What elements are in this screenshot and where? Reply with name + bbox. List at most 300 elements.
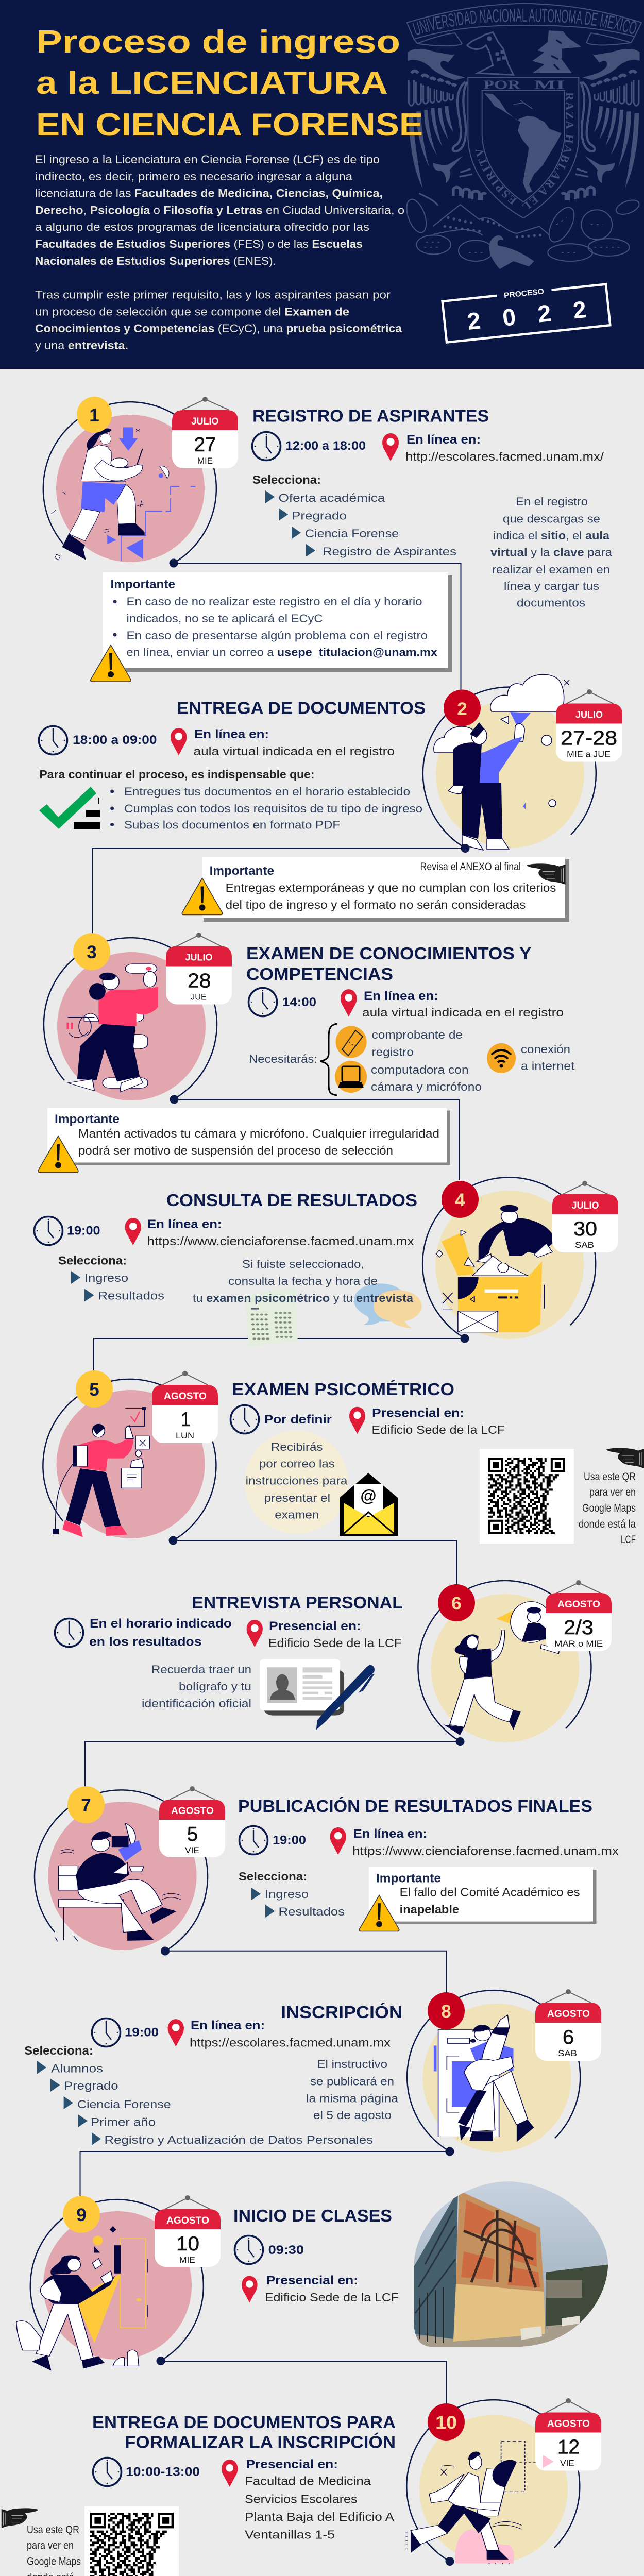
illustration: man with giant pencil (434, 2015, 534, 2142)
callout: importante: En caso de no realizar este registro en el día y horario (127, 595, 422, 608)
time: En el horario indicado (90, 1617, 232, 1631)
QR note (579, 1471, 636, 1546)
time: 10:00-13:00 (126, 2465, 200, 2479)
time: en los resultados (89, 1635, 201, 1649)
icon: pin (168, 2019, 184, 2046)
what you need: conexión (521, 1043, 570, 1056)
navigation steps: Resultados (278, 1905, 345, 1918)
location: En línea en: (364, 989, 438, 1003)
icon: ticket (336, 1026, 367, 1058)
ring (43, 402, 216, 563)
intro text: un proceso de selección que se compone del Examen de (35, 306, 349, 318)
calendar: agosto 5: 5 (187, 1823, 198, 1845)
time: 09:30 (268, 2243, 304, 2257)
navigation steps: Ingreso (265, 1888, 309, 1901)
title: INICIO DE CLASES (233, 2206, 392, 2225)
side note: realizar el examen en (492, 563, 610, 576)
location (372, 1406, 505, 1436)
note: instrucciones por correo: por correo las (259, 1457, 335, 1470)
callout: importante: indicados, no se te aplicará el ECyC (127, 612, 323, 625)
illustration: woman at toggle (68, 964, 158, 1092)
icon: clock (235, 2236, 263, 2264)
number badge 4 (442, 1181, 479, 1218)
dot endpoint (445, 2557, 454, 2566)
step 3: examen de conocimientos (38, 933, 574, 1180)
note: examen psicométrico and entrevista (193, 1258, 414, 1304)
step 4: consulta de resultados (34, 1177, 618, 1370)
circle background (431, 1594, 579, 1742)
intro text: Derecho, Psicología o Filosofía y Letras en Ciudad Universitaria, o (35, 204, 404, 217)
title: ENTREGA DE DOCUMENTOS PARA (92, 2413, 396, 2432)
circle background (48, 1802, 197, 1950)
intro text: Conocimientos y Competencias (ECyC), una prueba psicométrica (35, 322, 402, 335)
QR note: Usa este QR (27, 2524, 79, 2536)
what you need (249, 1024, 574, 1095)
QR note: para ver en (589, 1486, 636, 1498)
calendar: julio 30: SAB (575, 1240, 594, 1250)
circle background (57, 1390, 205, 1538)
side note: En el registro (516, 495, 588, 508)
title: COMPETENCIAS (246, 964, 393, 984)
requirements list: Entregues tus documentos en el horario establecido (124, 785, 410, 798)
title: CONSULTA DE RESULTADOS (166, 1191, 417, 1210)
navigation steps: Pregrado (64, 2079, 118, 2092)
location: Presencial en: (269, 1619, 361, 1633)
calendar: agosto 12: 12 (557, 2436, 580, 2459)
note: instrucciones por correo: examen (275, 1509, 319, 1521)
connector 1 to 2 (174, 563, 461, 690)
connector end dots (157, 558, 470, 2365)
location (245, 2458, 395, 2541)
calendar: agosto 5: AGOSTO (171, 1806, 214, 1817)
QR note: para ver en (27, 2540, 74, 2551)
title: ENTREGA DE DOCUMENTOS (177, 699, 426, 717)
calendar: agosto 1: AGOSTO (164, 1391, 207, 1402)
time: 14:00 (282, 995, 316, 1009)
navigation steps: Ciencia Forense (77, 2098, 171, 2111)
navigation steps: Selecciona: (252, 473, 321, 486)
number badge 10 (428, 2403, 465, 2441)
note: instructivo: El instructivo (317, 2058, 387, 2071)
icon: clock (93, 2458, 122, 2486)
location (147, 1217, 414, 1248)
note: examen psicométrico and entrevista: consulta la fecha y hora de (228, 1275, 378, 1287)
side note: línea y cargar tus (504, 580, 599, 592)
title (92, 2413, 396, 2451)
calendar: julio 27: MIE (197, 456, 213, 466)
step 9: inicio de clases (16, 2179, 611, 2404)
illustration: man on bench (56, 1823, 181, 1941)
step 1: registro de aspirantes (43, 397, 613, 690)
UNAM crest watermark: RAZA HABLARA EL ESPIRITV (475, 93, 573, 209)
navigation steps: Oferta académica (278, 492, 385, 504)
location: Edificio Sede de la LCF (265, 2291, 399, 2304)
requirements list: Subas los documentos en formato PDF (124, 819, 340, 832)
ring (44, 938, 217, 1099)
calendar: agosto 12 (535, 2398, 601, 2471)
time: 18:00 a 09:00 (73, 733, 157, 747)
calendar: julio 28: JUE (191, 992, 207, 1002)
requirements heading: Para continuar el proceso, es indispensable que: (39, 768, 314, 781)
icon: pin (222, 2460, 238, 2487)
location: Presencial en: (372, 1406, 464, 1420)
callout: importante: en línea, enviar un correo a usepe_titulacion@unam.mx (127, 646, 438, 659)
navigation steps: Registro de Aspirantes (323, 545, 456, 558)
navigation steps: Resultados (98, 1289, 164, 1302)
note: instrucciones por correo: presentar el (264, 1492, 330, 1504)
title: PUBLICACIÓN DE RESULTADOS FINALES (238, 1797, 592, 1816)
callout: importante: Entregas extemporáneas y que no cumplan con los criterios (226, 881, 556, 894)
calendar: julio 27-28: MIE a JUE (567, 749, 611, 759)
callout: importante: podrá ser motivo de suspensión del proceso de selección (78, 1144, 393, 1157)
navigation steps: Pregrado (292, 509, 347, 522)
location (268, 1619, 402, 1650)
number badge 4: 4 (455, 1190, 465, 1210)
title: FORMALIZAR LA INSCRIPCIÓN (125, 2433, 396, 2451)
step 5: examen psicométrico (43, 1370, 644, 1585)
connector 2 to 3 (92, 849, 465, 933)
ring (418, 1581, 591, 1741)
calendar: agosto 5: VIE (185, 1845, 199, 1855)
number badge 6: 6 (451, 1594, 462, 1614)
icon: email envelope (340, 1473, 398, 1536)
intro text (35, 153, 404, 352)
number badge 6 (438, 1584, 475, 1621)
ring (30, 2199, 204, 2361)
icon: check mark (39, 787, 100, 829)
requirements list: Cumplas con todos los requisitos de tu tipo de ingreso (124, 802, 422, 815)
note: examen psicométrico and entrevista: tu examen psicométrico y tu entrevista (193, 1292, 414, 1304)
what you need: cámara y micrófono (371, 1080, 482, 1093)
calendar: agosto 10: MIE (179, 2255, 195, 2265)
calendar: julio 30 (552, 1181, 618, 1252)
calendar: agosto 1: LUN (176, 1431, 194, 1440)
note: instructivo (306, 2058, 399, 2122)
location: Presencial en: (266, 2274, 358, 2287)
location: Servicios Escolares (245, 2493, 358, 2506)
location (265, 2274, 399, 2304)
connector 8 to 9 (80, 2151, 450, 2196)
intro text: licenciatura de las Facultades de Medicina, Ciencias, Química, (35, 187, 383, 200)
title: ENTREVISTA PERSONAL (192, 1593, 403, 1612)
calendar: agosto 6: SAB (558, 2048, 577, 2058)
step 7: publicación de resultados finales (35, 1786, 619, 1995)
UNAM crest watermark: POR (483, 78, 521, 92)
number badge 8: 8 (441, 2002, 451, 2022)
note: instrucciones por correo (245, 1431, 348, 1534)
callout: importante (91, 572, 452, 682)
icon: clock (92, 2019, 121, 2046)
navigation steps: Ingreso (84, 1272, 128, 1284)
location: aula virtual indicada en el registro (362, 1006, 564, 1019)
number badge 3: 3 (87, 942, 97, 962)
main title: Proceso de ingreso (36, 24, 400, 60)
note: traer bolígrafo: identificación oficial (142, 1697, 251, 1710)
location: aula virtual indicada en el registro (194, 744, 395, 758)
intro text: y una entrevista. (35, 339, 128, 352)
time: 19:00 (67, 1224, 100, 1238)
note: instructivo: se publicará en (310, 2075, 394, 2088)
number badge 8 (428, 1992, 465, 2029)
note: examen psicométrico and entrevista: Si fuiste seleccionado, (242, 1258, 364, 1270)
navigation steps: Ciencia Forense (305, 527, 399, 540)
callout: importante: Revisa el ANEXO al final (420, 861, 521, 873)
icon: clock (239, 1826, 268, 1855)
what you need: registro (372, 1046, 414, 1058)
ring (35, 1790, 208, 1951)
what you need: Necesitarás: (249, 1053, 317, 1065)
location: En línea en: (194, 727, 269, 741)
navigation steps (239, 1870, 345, 1918)
requirements list (110, 785, 422, 832)
note: traer bolígrafo: Recuerda traer un (151, 1663, 251, 1676)
ring (406, 2400, 580, 2562)
icon: clock (39, 726, 67, 754)
icon: clock (34, 1217, 63, 1245)
UNAM crest watermark: MI (534, 78, 565, 92)
calendar: julio 27: 27 (194, 434, 216, 456)
icon: wifi (487, 1043, 516, 1073)
icon: pin (247, 1620, 263, 1647)
UNAM crest watermark (406, 3, 642, 269)
number badge 5: 5 (89, 1380, 99, 1400)
time: 12:00 a 18:00 (285, 439, 366, 453)
location: Presencial en: (246, 2458, 338, 2471)
callout: importante: El fallo del Comité Académico es (400, 1886, 580, 1899)
icon: pin (341, 989, 357, 1016)
illustration: woman opening door (16, 2226, 148, 2371)
icon: pointing hand (606, 1448, 644, 1468)
title: EXAMEN DE CONOCIMIENTOS Y (246, 944, 532, 963)
location (190, 2019, 391, 2049)
calendar: julio 27: JULIO (192, 416, 218, 427)
circle background (422, 2004, 571, 2152)
intro text: Nacionales de Estudios Superiores (ENES). (35, 255, 276, 267)
location: Edificio Sede de la LCF (268, 1636, 402, 1650)
location (352, 1827, 619, 1858)
ring (407, 1990, 580, 2151)
icon: laptop (335, 1061, 367, 1093)
header panel (0, 0, 644, 369)
proceso 2022 stamp: 2 0 2 2 (466, 296, 588, 335)
callout: importante: Importante (55, 1112, 120, 1126)
time: 19:00 (273, 1834, 306, 1848)
number badge 2 (444, 689, 481, 726)
QR note (27, 2524, 81, 2576)
callout: importante: Importante (210, 864, 274, 878)
side note: que descargas se (503, 512, 600, 526)
callout: importante (359, 1867, 597, 1931)
location: En línea en: (353, 1827, 427, 1841)
calendar: julio 27-28: JULIO (575, 710, 603, 720)
calendar: agosto 6: 6 (563, 2026, 574, 2048)
side note (490, 495, 613, 609)
location: http://escolares.facmed.unam.mx/ (405, 450, 604, 463)
QR note: Google Maps (27, 2556, 81, 2568)
connector 9 to 10 (161, 2361, 446, 2404)
title: EXAMEN PSICOMÉTRICO (232, 1380, 454, 1399)
icon: pin (125, 1218, 141, 1245)
navigation steps (252, 473, 456, 558)
location: En línea en: (147, 1217, 222, 1231)
illustration: man with box (436, 1205, 554, 1332)
callout: importante (38, 1108, 450, 1173)
calendar: agosto 5 (159, 1786, 225, 1857)
number badge 3 (73, 933, 110, 970)
UNAM crest watermark: UNIVERSIDAD NACIONAL AUTONOMA DE MEXICO (412, 8, 637, 35)
calendar: agosto 2/3: AGOSTO (557, 1599, 600, 1610)
navigation steps (58, 1254, 164, 1302)
icon: pin (242, 2276, 258, 2302)
decoration: answer sheet and speech bubbles (245, 1283, 422, 1346)
connector 3 to 4 (174, 1100, 459, 1180)
navigation steps (24, 2044, 373, 2146)
location (194, 727, 395, 758)
callout: importante: En caso de presentarse algún problema con el registro (127, 629, 428, 642)
intro text: Facultades de Estudios Superiores (FES) o de las Escuelas (35, 238, 363, 250)
number badge 7: 7 (81, 1795, 91, 1816)
QR code (480, 1449, 574, 1544)
callout: importante: del tipo de ingreso y el formato no serán consideradas (226, 898, 526, 911)
note: instructivo: la misma página (306, 2092, 399, 2105)
connector 5 to 6 (173, 1540, 457, 1585)
icon: pin (382, 433, 399, 461)
callout: importante: inapelable (400, 1903, 459, 1916)
main title: a la LICENCIATURA (36, 65, 388, 101)
calendar: agosto 12: AGOSTO (547, 2418, 590, 2430)
number badge 1: 1 (89, 405, 99, 426)
step 6: entrevista personal (55, 1580, 612, 1786)
QR note: LCF (621, 1534, 636, 1546)
step 2: entrega de documentos (39, 674, 622, 933)
proceso 2022 stamp (442, 281, 610, 343)
ring (43, 1379, 216, 1540)
location: En línea en: (191, 2019, 265, 2032)
callout: importante: Importante (376, 1872, 441, 1886)
illustration: woman and video call (444, 1602, 560, 1735)
calendar: julio 27-28 (556, 689, 622, 761)
icon: clock (248, 988, 277, 1016)
calendar: agosto 2/3: MAR o MIE (554, 1639, 603, 1649)
side note: indica el sitio, el aula (493, 529, 610, 542)
location: Ventanillas 1-5 (245, 2528, 335, 2541)
calendar: agosto 1 (152, 1371, 218, 1443)
calendar: agosto 6: AGOSTO (547, 2009, 590, 2020)
step 8: inscripción (24, 1989, 601, 2196)
QR note: Usa este QR (584, 1471, 636, 1483)
icon: clock (55, 1619, 83, 1647)
intro text: El ingreso a la Licenciatura en Ciencia Forense (LCF) es de tipo (35, 153, 380, 166)
what you need: comprobante de (372, 1028, 463, 1041)
title: REGISTRO DE ASPIRANTES (252, 406, 489, 426)
QR code (84, 2506, 179, 2576)
note: traer bolígrafo: bolígrafo y tu (179, 1680, 251, 1693)
note: traer bolígrafo (142, 1663, 251, 1710)
illustration: man with checklist (53, 1408, 149, 1537)
icon: pin (349, 1407, 365, 1434)
connector 7 to 8 (165, 1951, 446, 1995)
number badge 1 (77, 397, 112, 433)
QR note: donde está la (579, 1518, 636, 1530)
illustration: man walking with document (406, 2441, 554, 2564)
number badge 9: 9 (76, 2205, 87, 2225)
callout: importante: Mantén activados tu cámara y micrófono. Cualquier irregularidad (78, 1127, 439, 1140)
location: Planta Baja del Edificio A (245, 2510, 395, 2523)
time: 19:00 (125, 2026, 159, 2039)
what you need: computadora con (371, 1063, 469, 1076)
location: https://www.cienciaforense.facmed.unam.mx (147, 1234, 414, 1248)
calendar: julio 28 (166, 933, 232, 1005)
note: instructivo: el 5 de agosto (313, 2109, 392, 2122)
what you need: a internet (521, 1059, 574, 1073)
calendar: agosto 1: 1 (181, 1409, 191, 1431)
number badge 10: 10 (435, 2413, 457, 2433)
navigation steps: Selecciona: (24, 2044, 93, 2057)
circle background (419, 2415, 568, 2564)
illustration: person with clouds (434, 674, 569, 850)
calendar: julio 27-28: 27-28 (561, 727, 617, 749)
navigation steps: Selecciona: (239, 1870, 307, 1883)
main title (36, 24, 423, 143)
time (89, 1617, 232, 1649)
location: Edificio Sede de la LCF (372, 1423, 505, 1436)
proceso 2022 stamp: PROCESO (503, 287, 545, 300)
time: Por definir (264, 1413, 332, 1427)
calendar: agosto 6 (535, 1989, 601, 2061)
calendar: agosto 10: 10 (176, 2233, 199, 2255)
location: En línea en: (406, 433, 481, 447)
circle background (435, 1191, 584, 1339)
icon: pin (171, 728, 187, 755)
calendar: julio 28: 28 (188, 970, 211, 992)
side note: documentos (517, 597, 585, 609)
intro text: Tras cumplir este primer requisito, las y los aspirantes pasan por (35, 289, 391, 301)
calendar: agosto 12: VIE (560, 2459, 574, 2468)
circle background (43, 2211, 192, 2360)
title: INSCRIPCIÓN (281, 2003, 402, 2022)
icon: pin (330, 1827, 346, 1855)
icon: ID card and pen (260, 1659, 375, 1730)
calendar: agosto 2/3 (546, 1580, 612, 1651)
number badge 2: 2 (457, 699, 467, 719)
location (362, 989, 564, 1019)
calendar: agosto 10: AGOSTO (166, 2215, 209, 2226)
location: https://www.cienciaforense.facmed.unam.mx (352, 1844, 619, 1858)
navigation steps: Primer año (91, 2115, 156, 2129)
circle background (57, 952, 206, 1100)
title (246, 944, 532, 984)
main title: EN CIENCIA FORENSE (36, 107, 423, 143)
number badge 5 (76, 1370, 113, 1408)
step 10: entrega de documentos para formalizar (2, 2398, 601, 2576)
navigation steps: Registro y Actualización de Datos Personales (104, 2133, 373, 2146)
icon: clock (231, 1405, 259, 1433)
location: Facultad de Medicina (245, 2474, 371, 2487)
side note: virtual y la clave para (490, 546, 613, 559)
location (405, 433, 604, 463)
circle background (436, 701, 584, 848)
navigation steps: Selecciona: (58, 1254, 127, 1267)
calendar: julio 30: 30 (573, 1218, 597, 1240)
intro text: indirecto, es decir, primero es necesario ingresar a alguna (35, 170, 353, 183)
calendar: julio 28: JULIO (185, 952, 212, 963)
photo: building with mural (412, 2179, 611, 2349)
calendar: julio 27 (172, 397, 238, 468)
icon: email envelope: @ (360, 1486, 377, 1505)
connector 6 to 7 (85, 1741, 460, 1786)
calendar: julio 30: JULIO (572, 1200, 599, 1211)
illustration: woman climbing with laptop (51, 427, 195, 561)
